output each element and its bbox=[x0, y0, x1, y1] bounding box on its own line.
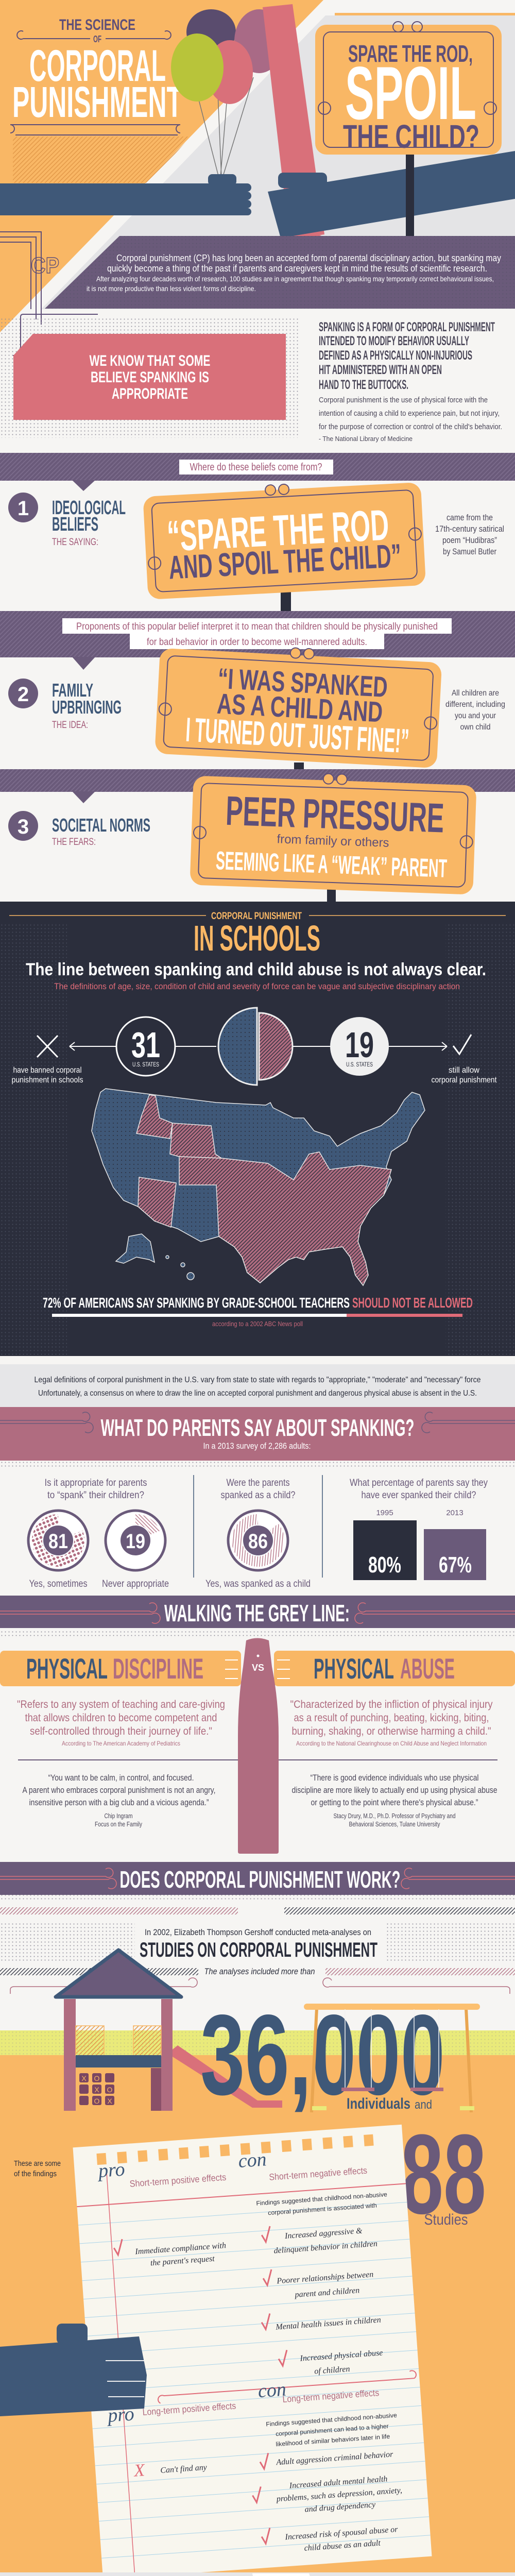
quote: physical abuse definition bbox=[290, 1699, 493, 1747]
quote: physical discipline definition: According to The American Academy of Pediatrics bbox=[62, 1740, 180, 1747]
sign: spare the rod spoil the child bbox=[315, 22, 502, 237]
text: these are some of the findings: These are some bbox=[14, 2159, 61, 2168]
chart: split circle bbox=[175, 1008, 330, 1085]
belief 3 heading: THE FEARS: bbox=[52, 837, 96, 848]
quote: Chip Ingram: A parent who embraces corporal punishment is not an angry, bbox=[23, 1785, 215, 1795]
heading: what do parents say bbox=[0, 1407, 515, 1468]
icon: swing set bbox=[304, 2004, 480, 2112]
banner: discipline vs abuse with paddle bbox=[0, 1638, 515, 1854]
stat: 31 states banned: have banned corporal bbox=[13, 1066, 81, 1075]
72% poll stat: according to a 2002 ABC News poll bbox=[212, 1320, 303, 1328]
band: where do these beliefs come from bbox=[0, 453, 515, 491]
belief 1 heading: 1 bbox=[18, 497, 29, 520]
quote: Stacy Drury: or getting to the point where there's physical abuse.” bbox=[311, 1798, 478, 1807]
paddle bbox=[263, 4, 325, 246]
icon: playhouse with slide: O bbox=[107, 2086, 113, 2094]
bar chart: ever spanked bbox=[350, 1478, 488, 1580]
stat: 36,000 individuals: and bbox=[415, 2098, 432, 2112]
belief 1 side note: 17th-century satirical bbox=[435, 524, 504, 534]
notepaper: pros and cons: of children bbox=[314, 2365, 350, 2376]
sign: I was spanked: “I WAS SPANKED bbox=[217, 662, 388, 703]
definition text: HAND TO THE BUTTOCKS. bbox=[319, 378, 408, 392]
heading: walking the grey line: WALKING THE GREY LINE: bbox=[164, 1600, 350, 1626]
72% poll stat bbox=[43, 1295, 473, 1328]
quote: physical abuse definition: According to the National Clearinghouse on Child Abuse and Neglect Information bbox=[296, 1740, 487, 1747]
belief 2 heading bbox=[8, 679, 122, 731]
notepaper: pros and cons: Increased adult mental health bbox=[288, 2475, 388, 2490]
icon: arm holding notepaper bbox=[0, 2324, 147, 2416]
belief 1 side note: poem “Hudibras” bbox=[442, 535, 497, 545]
schools title: CORPORAL PUNISHMENT bbox=[211, 911, 302, 922]
chart: is spanking appropriate bbox=[28, 1475, 194, 1589]
stat: 19 states allow: corporal punishment bbox=[432, 1076, 497, 1084]
quote: Stacy Drury: Behavioral Sciences, Tulane University bbox=[349, 1820, 440, 1828]
belief 1 heading: BELIEFS bbox=[52, 514, 98, 535]
notepaper: pros and cons: con bbox=[257, 2379, 287, 2402]
icon: playhouse with slide: X bbox=[107, 2097, 112, 2105]
chart: is spanking appropriate: Yes, sometimes bbox=[29, 1579, 88, 1589]
belief 2 heading: THE IDEA: bbox=[52, 720, 88, 731]
bar chart: ever spanked: 67% bbox=[439, 1552, 472, 1578]
notepaper: pros and cons: Increased physical abuse bbox=[299, 2348, 383, 2363]
notepaper: pros and cons: con bbox=[237, 2148, 267, 2172]
studies intro: In 2002, Elizabeth Thompson Gershoff conducted meta-analyses on bbox=[145, 1927, 371, 1937]
chart: is spanking appropriate: 19 bbox=[126, 1530, 145, 1553]
text: these are some of the findings bbox=[14, 2159, 61, 2178]
bar chart: ever spanked: What percentage of parents say they bbox=[350, 1478, 488, 1488]
band: proponents: Proponents of this popular belief interpret it to mean that children should be physically punished bbox=[76, 621, 438, 632]
definition text: - The National Library of Medicine bbox=[319, 435, 413, 443]
belief 1 heading bbox=[8, 493, 126, 548]
studies intro: The analyses included more than bbox=[204, 1967, 315, 1976]
quote: Chip Ingram: Focus on the Family bbox=[95, 1820, 142, 1828]
callout: some believe spanking is appropriate: BELIEVE SPANKING IS bbox=[91, 369, 209, 386]
chart: spanked as a child: spanked as a child? bbox=[220, 1490, 296, 1501]
belief 2 heading: UPBRINGING bbox=[52, 697, 122, 718]
belief 2 heading: FAMILY bbox=[52, 680, 93, 701]
sign: peer pressure bbox=[190, 769, 477, 902]
notepaper: pros and cons: Long-term negative effects bbox=[282, 2387, 380, 2404]
stat: 31 states banned bbox=[11, 1017, 175, 1084]
stat: 36,000 individuals: Individuals bbox=[347, 2095, 410, 2112]
arms bbox=[0, 151, 515, 238]
notepaper: pros and cons: pro bbox=[96, 2158, 126, 2182]
belief 3 heading: SOCIETAL NORMS bbox=[52, 815, 150, 836]
CP frame: CP bbox=[31, 253, 59, 278]
title: THE SCIENCE bbox=[59, 16, 135, 33]
belief 1 side note bbox=[435, 513, 504, 556]
chart: spanked as a child: 86 bbox=[248, 1530, 268, 1553]
sign: I was spanked bbox=[154, 641, 442, 770]
banner: discipline vs abuse with paddle: ABUSE bbox=[400, 1652, 455, 1685]
stat: 88 studies: Studies bbox=[424, 2211, 468, 2228]
notepaper: pros and cons: X bbox=[132, 2461, 146, 2481]
stat: 31 states banned: U.S. STATES bbox=[132, 1061, 159, 1068]
chart: spanked as a child bbox=[205, 1475, 322, 1589]
notepaper: pros and cons: problems, such as depression, anxiety, bbox=[276, 2486, 402, 2503]
band: proponents: for bad behavior in order to become well-mannered adults. bbox=[147, 637, 367, 648]
US map bbox=[92, 1089, 425, 1285]
chart: spanked as a child: Yes, was spanked as a child bbox=[205, 1579, 311, 1589]
title bbox=[10, 16, 182, 135]
banner: discipline vs abuse with paddle: PHYSICAL bbox=[314, 1652, 394, 1685]
notepaper: pros and cons: Increased risk of spousal abuse or bbox=[284, 2525, 399, 2541]
title: OF bbox=[93, 34, 101, 44]
bar chart: ever spanked: 80% bbox=[368, 1552, 401, 1578]
belief 1 heading: THE SAYING: bbox=[52, 537, 98, 548]
icon: playhouse with slide: O bbox=[94, 2097, 100, 2105]
heading: does corporal punishment work (1) bbox=[0, 1862, 515, 1901]
schools title: The definitions of age, size, condition of child and severity of force can be vague and subjective disciplinary action bbox=[54, 981, 460, 991]
banner: discipline vs abuse with paddle: DISCIPLINE bbox=[113, 1652, 203, 1685]
stat: 19 states allow bbox=[330, 1017, 497, 1084]
sign: peer pressure: from family or others bbox=[277, 832, 389, 850]
CP frame bbox=[0, 232, 98, 361]
intro panel bbox=[45, 236, 515, 309]
notepaper: pros and cons: pro bbox=[106, 2403, 135, 2427]
sign: I was spanked: AS A CHILD AND bbox=[216, 687, 384, 728]
quote: Chip Ingram: insensitive person with a big club and a vicious agenda.” bbox=[29, 1798, 209, 1807]
notepaper: pros and cons: the parent's request bbox=[150, 2255, 215, 2267]
schools title: IN SCHOOLS bbox=[194, 918, 320, 958]
playground background bbox=[0, 2030, 515, 2572]
quote: physical abuse definition: as a result of punching, beating, kicking, biting, bbox=[294, 1712, 489, 1724]
band divider 3 bbox=[0, 769, 515, 803]
text: these are some of the findings: of the findings bbox=[14, 2170, 57, 2178]
notepaper: pros and cons: Short-term positive effects bbox=[129, 2172, 227, 2189]
quote: Stacy Drury: “There is good evidence individuals who use physical bbox=[310, 1773, 479, 1783]
bar chart: ever spanked: 1995 bbox=[376, 1509, 393, 1517]
world map bbox=[154, 2573, 515, 2576]
stat: 31 states banned: punishment in schools bbox=[11, 1076, 83, 1084]
belief 1 side note: by Samuel Butler bbox=[443, 547, 496, 556]
quote: Stacy Drury: Stacy Drury, M.D., Ph.D. Professor of Psychiatry and bbox=[334, 1812, 455, 1820]
sign: spare the rod and spoil the child bbox=[143, 477, 426, 611]
notepaper: pros and cons: parent and children bbox=[294, 2286, 360, 2299]
quote: physical abuse definition: burning, shaking, or otherwise harming a child." bbox=[291, 1725, 491, 1737]
notepaper: pros and cons: Mental health issues in children bbox=[275, 2315, 381, 2332]
quote: Chip Ingram: Chip Ingram bbox=[104, 1812, 133, 1820]
icon: playhouse with slide: O bbox=[94, 2074, 100, 2082]
bar chart: ever spanked: have ever spanked their child? bbox=[362, 1490, 476, 1501]
notepaper: pros and cons: child abuse as an adult bbox=[304, 2539, 381, 2553]
chart: is spanking appropriate: 81 bbox=[48, 1530, 68, 1553]
banner: discipline vs abuse with paddle: PHYSICAL bbox=[26, 1652, 108, 1685]
belief 2 side note: different, including bbox=[445, 700, 505, 709]
stat: 19 states allow: still allow bbox=[449, 1066, 479, 1075]
belief 2 side note: you and your bbox=[455, 711, 496, 720]
notepaper: pros and cons: likelihood of similar behaviors later in life bbox=[276, 2433, 390, 2448]
balloons bbox=[171, 9, 284, 178]
chart: spanked as a child: Were the parents bbox=[227, 1478, 289, 1488]
callout: some believe spanking is appropriate: APPROPRIATE bbox=[112, 385, 188, 402]
belief 3 heading bbox=[8, 811, 150, 848]
belief 3 heading: 3 bbox=[18, 816, 29, 838]
callout: some believe spanking is appropriate: WE KNOW THAT SOME bbox=[90, 352, 210, 369]
quote: Chip Ingram bbox=[23, 1773, 215, 1828]
icon: playhouse with slide bbox=[56, 1950, 282, 2111]
belief 2 side note bbox=[445, 689, 505, 732]
notepaper: pros and cons: Adult aggression criminal behavior bbox=[276, 2450, 394, 2467]
bar chart: ever spanked: 2013 bbox=[446, 1509, 464, 1517]
notepaper: pros and cons: Increased aggressive & bbox=[284, 2227, 363, 2241]
stat: 19 states allow: 19 bbox=[345, 1025, 374, 1065]
icon: playhouse with slide: X bbox=[81, 2074, 87, 2082]
belief 2 heading: 2 bbox=[18, 683, 29, 706]
callout: some believe spanking is appropriate bbox=[0, 316, 300, 438]
notepaper: pros and cons: Short-term negative effects bbox=[269, 2165, 368, 2182]
notepaper: pros and cons: Can't find any bbox=[160, 2463, 208, 2475]
notepaper: pros and cons: Poorer relationships between bbox=[276, 2270, 374, 2285]
legal definitions note bbox=[0, 1364, 515, 1407]
definition text bbox=[319, 320, 502, 443]
quote: physical discipline definition: self-controlled through their journey of life." bbox=[30, 1725, 212, 1737]
schools title bbox=[9, 911, 506, 991]
hero background bbox=[0, 0, 515, 332]
title: PUNISHMENT bbox=[12, 78, 182, 126]
belief 2 side note: own child bbox=[460, 723, 490, 732]
belief 1 side note: came from the bbox=[447, 513, 493, 522]
band: where do these beliefs come from: Where do these beliefs come from? bbox=[190, 462, 322, 473]
definition text: Corporal punishment is the use of physical force with the bbox=[319, 396, 488, 404]
quote: Stacy Drury bbox=[291, 1773, 497, 1828]
quote: physical discipline definition: "Refers to any system of teaching and care-giving bbox=[17, 1699, 225, 1710]
heading: walking the grey line bbox=[0, 1596, 515, 1636]
chart: is spanking appropriate: Never appropriate bbox=[102, 1579, 169, 1589]
notepaper: pros and cons bbox=[73, 2125, 432, 2576]
belief 2 side note: All children are bbox=[452, 689, 499, 698]
chart: is spanking appropriate: to “spank” their children? bbox=[47, 1490, 144, 1501]
quote: physical discipline definition: that allows children to become competent and bbox=[25, 1712, 217, 1724]
band: proponents bbox=[0, 611, 515, 670]
heading: what do parents say: In a 2013 survey of 2,286 adults: bbox=[203, 1441, 311, 1451]
72% poll stat: 72% OF AMERICANS SAY SPANKING BY GRADE-SCHOOL TEACHERS bbox=[43, 1295, 350, 1311]
notepaper: pros and cons: corporal punishment is associated with bbox=[268, 2201, 377, 2216]
notepaper: pros and cons: Findings suggested that childhood non-abusive bbox=[266, 2412, 398, 2428]
notepaper: pros and cons: Findings suggested that childhood non-abusive bbox=[256, 2191, 388, 2207]
quote: Chip Ingram: “You want to be calm, in control, and focused. bbox=[48, 1773, 194, 1783]
notepaper: pros and cons: delinquent behavior in children bbox=[273, 2240, 377, 2256]
icon: playhouse with slide: X bbox=[94, 2086, 99, 2094]
schools section background bbox=[0, 902, 515, 1356]
notepaper: pros and cons: Long-term positive effects bbox=[142, 2400, 236, 2417]
intro panel: it is not more productive than less violent forms of discipline. bbox=[87, 284, 256, 293]
stat: 19 states allow: U.S. STATES bbox=[346, 1061, 373, 1068]
notepaper: pros and cons: Immediate compliance with bbox=[134, 2241, 226, 2256]
stat: 31 states banned: 31 bbox=[131, 1025, 160, 1065]
belief 1 heading: IDEOLOGICAL bbox=[52, 497, 126, 519]
quote: physical discipline definition bbox=[17, 1699, 225, 1747]
title: CORPORAL bbox=[29, 41, 166, 91]
notepaper: pros and cons: corporal punishment can lead to a higher bbox=[276, 2422, 389, 2437]
quote: physical abuse definition: "Characterized by the infliction of physical injury bbox=[290, 1699, 493, 1710]
world section background bbox=[0, 2572, 515, 2576]
chart: is spanking appropriate: Is it appropriate for parents bbox=[44, 1478, 147, 1488]
banner: discipline vs abuse with paddle: VS bbox=[252, 1663, 264, 1673]
notepaper: pros and cons: and drug dependency bbox=[304, 2500, 376, 2514]
studies intro bbox=[0, 1907, 515, 1994]
